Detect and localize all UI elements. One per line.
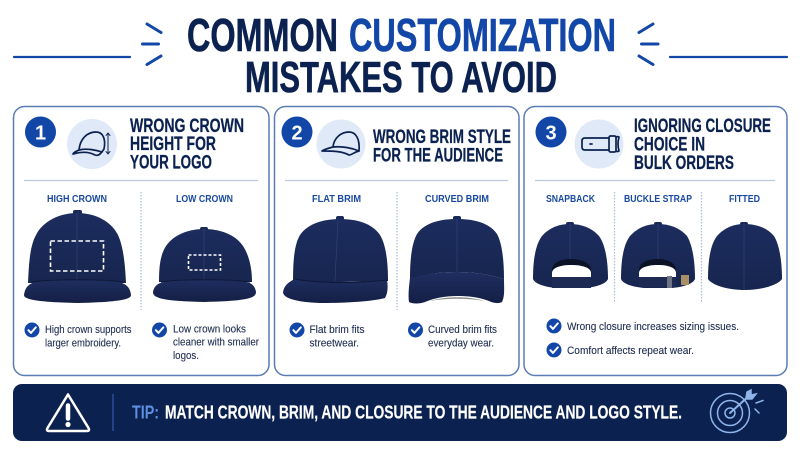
label high crown: HIGH CROWN — [47, 193, 107, 205]
icon: cap with height arrows — [67, 119, 117, 169]
label snapback: SNAPBACK — [546, 193, 595, 205]
check 2a: Flat brim fits — [310, 324, 365, 336]
number badge 2 — [282, 116, 312, 148]
label flat brim: FLAT BRIM — [312, 193, 361, 205]
check 2a — [290, 322, 365, 350]
left title accent — [14, 24, 161, 64]
check 2b: everyday wear. — [428, 338, 494, 350]
heading 1 — [130, 116, 244, 174]
heading 3 — [634, 116, 771, 174]
icon: warning triangle — [47, 394, 89, 431]
check 3b: Comfort affects repeat wear. — [567, 345, 694, 357]
title: COMMON — [187, 9, 338, 61]
icon: target with arrow — [710, 390, 763, 432]
low crown cap — [153, 227, 256, 302]
heading 1: YOUR LOGO — [130, 152, 212, 174]
check 1a: High crown supports — [45, 324, 132, 336]
heading 1: HEIGHT FOR — [130, 134, 216, 155]
heading 2: WRONG BRIM STYLE — [373, 127, 511, 148]
number badge 2: 2 — [291, 122, 303, 144]
number badge 1 — [25, 116, 56, 148]
heading 2 — [373, 127, 511, 166]
check 1b: cleaner with smaller — [173, 336, 259, 348]
title: MISTAKES TO AVOID — [245, 53, 557, 102]
heading 1: WRONG CROWN — [130, 116, 244, 137]
check 2b: Curved brim fits — [428, 324, 497, 336]
curved brim cap — [409, 216, 504, 304]
number badge 1: 1 — [35, 122, 46, 144]
label low crown: LOW CROWN — [176, 193, 233, 205]
number badge 3: 3 — [545, 122, 557, 144]
tip banner — [13, 384, 787, 441]
title — [187, 9, 616, 102]
check 1a — [24, 322, 132, 350]
snapback cap — [533, 222, 608, 288]
check 1b: Low crown looks — [173, 324, 246, 336]
heading 2: FOR THE AUDIENCE — [373, 146, 503, 166]
title: CUSTOMIZATION — [349, 9, 616, 61]
label fitted: FITTED — [729, 193, 760, 205]
panel 2: brim style — [274, 106, 519, 376]
panel 1: crown height — [14, 106, 269, 376]
check 2b — [408, 322, 497, 350]
heading 3: CHOICE IN — [634, 134, 705, 156]
flat brim cap — [283, 216, 388, 303]
buckle strap cap — [621, 222, 695, 288]
heading 3: BULK ORDERS — [634, 153, 734, 174]
panel 3: closure — [524, 106, 787, 376]
icon: cap side view — [316, 120, 366, 168]
fitted cap — [708, 222, 782, 290]
check 1b: logos. — [173, 350, 199, 362]
check 1b — [152, 322, 259, 362]
check 3b — [546, 342, 694, 358]
check 3a: Wrong closure increases sizing issues. — [567, 321, 739, 333]
tip text: TIP: — [132, 402, 159, 422]
label curved brim: CURVED BRIM — [425, 193, 489, 205]
icon: buckle strap — [574, 120, 624, 168]
high crown cap — [24, 210, 131, 303]
number badge 3 — [536, 116, 566, 148]
check 3a — [546, 318, 739, 334]
check 1a: larger embroidery. — [45, 338, 121, 350]
right title accent — [639, 24, 787, 64]
label buckle strap: BUCKLE STRAP — [624, 193, 692, 205]
check 2a: streetwear. — [310, 338, 359, 350]
